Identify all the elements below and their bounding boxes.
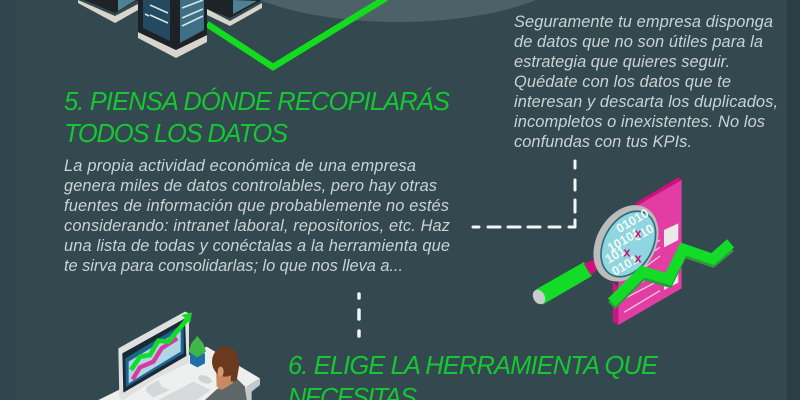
text block: step 5: La propia actividad económica de una empresa	[64, 157, 416, 175]
person	[205, 347, 247, 400]
magnifier lens: 0101	[609, 252, 641, 279]
right server	[207, 0, 262, 26]
heading: step 6	[288, 352, 659, 400]
text block: discard data: Quédate con los datos que te	[514, 73, 731, 91]
magnifier lens: x	[635, 252, 642, 266]
magnifier lens: x	[635, 227, 642, 241]
text block: discard data: estrategia que quieres seguir.	[514, 53, 730, 71]
heading: step 5	[64, 87, 450, 148]
magnifier lens: 101	[603, 244, 628, 267]
text block: step 5	[64, 157, 450, 275]
left server	[78, 0, 138, 23]
text block: discard data: confundas con tus KPIs.	[514, 133, 692, 151]
magnifier lens: 01010	[614, 206, 651, 236]
magnifier lens	[580, 193, 672, 293]
centre server	[138, 0, 207, 58]
text block: discard data: Seguramente tu empresa disponga	[514, 13, 773, 31]
monitor	[118, 312, 189, 400]
icon: magnifier over document	[530, 177, 731, 325]
desk	[98, 347, 260, 400]
magnifier lens: 010	[631, 222, 656, 244]
dashed connector: centre	[357, 294, 361, 336]
text block: discard data: de datos que no son útiles para la	[514, 33, 763, 51]
heading: step 5: 5. PIENSA DÓNDE RECOPILARÁS	[64, 87, 450, 116]
dashed connector: right	[473, 161, 575, 227]
magnifier lens: 10101	[605, 226, 643, 255]
keyboard and mouse	[158, 373, 213, 400]
text block: step 5: fuentes de información que probablemente no estés	[64, 197, 449, 215]
text block: discard data	[514, 13, 778, 151]
text block: step 5: considerando: intranet laboral, repositorios, etc. Haz	[64, 217, 450, 235]
text block: step 5: te sirva para consolidarlas; lo que nos lleva a...	[64, 257, 403, 275]
plant	[189, 336, 206, 367]
text block: step 5: genera miles de datos controlables, pero hay otras	[64, 177, 437, 195]
zigzag green arrow	[612, 243, 731, 306]
chart lines	[131, 312, 192, 379]
platform ellipse	[220, 0, 576, 22]
text block: discard data: interesan y descarta los duplicados,	[514, 93, 778, 111]
heading: step 5: TODOS LOS DATOS	[64, 120, 288, 148]
text block: discard data: incompletos o inexistentes. No los	[514, 113, 765, 131]
heading: step 6: 6. ELIGE LA HERRAMIENTA QUE	[288, 352, 659, 380]
green connector line	[207, 0, 386, 67]
magnifier handle	[530, 259, 597, 306]
icon: servers	[78, 0, 262, 58]
magnifier lens: x	[623, 246, 630, 260]
text block: step 5: una lista de todas y conéctalas a la herramienta que	[64, 237, 450, 255]
document	[613, 177, 682, 325]
icon: person at computer	[98, 312, 260, 400]
